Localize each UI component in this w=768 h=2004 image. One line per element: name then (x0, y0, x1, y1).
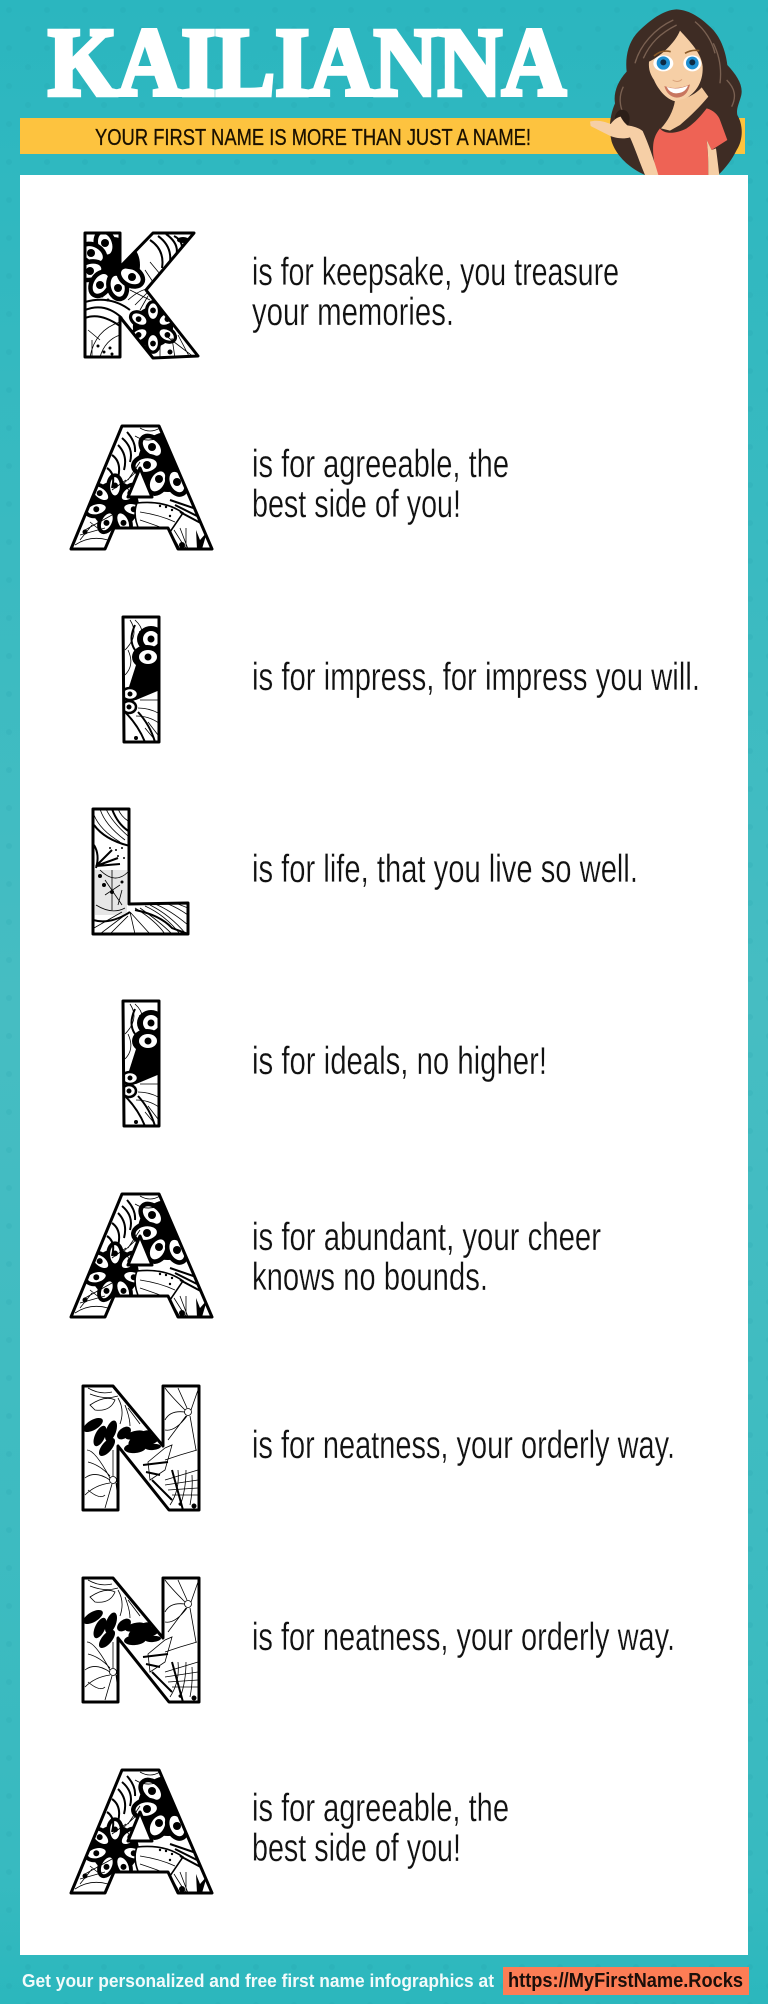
subtitle banner (20, 118, 745, 154)
text: K line: your memories. (252, 291, 454, 334)
text: L line: is for life, that you live so well. (252, 848, 638, 891)
text: A line (252, 1787, 509, 1870)
text: A line: best side of you! (252, 1827, 461, 1870)
icon: patterned letter I (122, 617, 165, 742)
row: I (122, 617, 700, 742)
icon: patterned letter A (71, 1770, 212, 1893)
row: N (81, 1578, 675, 1702)
text: A line (252, 443, 509, 526)
illustration: smiling woman (590, 9, 742, 175)
row: K (76, 229, 619, 358)
row: A (71, 426, 509, 549)
icon: patterned letter I (122, 1001, 165, 1126)
icon: patterned letter L (93, 809, 188, 934)
row: I (122, 1001, 547, 1126)
row: A (71, 1770, 509, 1893)
subtitle banner: YOUR FIRST NAME IS MORE THAN JUST A NAME! (95, 124, 531, 150)
text: A line: is for abundant, your cheer (252, 1216, 601, 1259)
row: L (93, 809, 638, 934)
text: A line: knows no bounds. (252, 1256, 488, 1299)
row: N (81, 1386, 675, 1510)
footer (22, 1967, 749, 1995)
icon: patterned letter N (81, 1386, 199, 1510)
text: A line: is for agreeable, the (252, 443, 509, 486)
text: I line: is for ideals, no higher! (252, 1040, 547, 1083)
title: KAILIANNA (48, 9, 566, 116)
icon: patterned letter A (71, 426, 212, 549)
icon: patterned letter K (76, 229, 198, 358)
row: A (71, 1194, 601, 1317)
text: K line (252, 251, 619, 334)
text: A line: best side of you! (252, 483, 461, 526)
text: A line: is for agreeable, the (252, 1787, 509, 1830)
icon: patterned letter A (71, 1194, 212, 1317)
text: A line (252, 1216, 601, 1299)
icon: patterned letter N (81, 1578, 199, 1702)
text: K line: is for keepsake, you treasure (252, 251, 619, 294)
footer link badge: https://MyFirstName.Rocks (508, 1970, 743, 1992)
footer text: Get your personalized and free first name infographics at (22, 1971, 494, 1991)
